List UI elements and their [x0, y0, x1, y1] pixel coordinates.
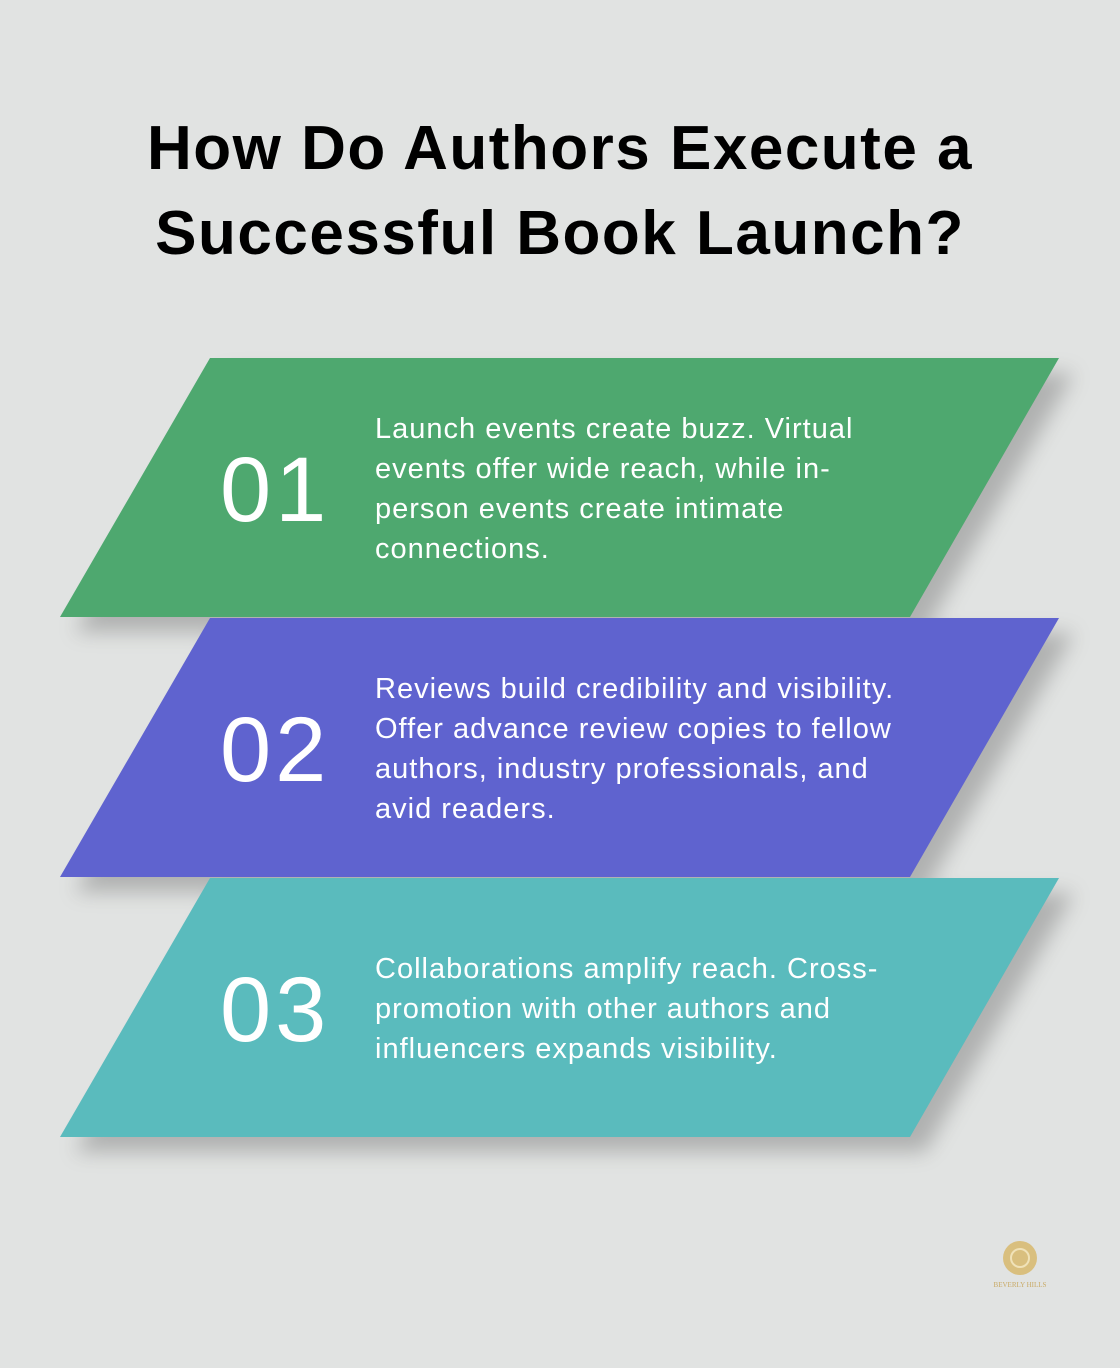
panel 2 shape — [60, 618, 1059, 877]
logo: BEVERLY HILLS — [994, 1281, 1047, 1289]
title: How Do Authors Execute a — [147, 114, 973, 183]
panel 3 shape — [60, 878, 1059, 1137]
panel 1 shape — [60, 358, 1059, 617]
number 01: 01 — [220, 439, 330, 541]
logo — [994, 1241, 1047, 1289]
number 03: 03 — [220, 959, 330, 1061]
text 03: Collaborations amplify reach. Cross-promotion with other authors and influencers expands visibility. — [375, 953, 878, 1065]
text 01: Launch events create buzz. Virtual events offer wide reach, while in-person events create intimate connections. — [375, 413, 853, 565]
number 02: 02 — [220, 699, 330, 801]
text 02: Reviews build credibility and visibility. Offer advance review copies to fellow authors, industry professionals, and avid readers. — [375, 673, 894, 825]
title: Successful Book Launch? — [155, 199, 965, 268]
shadows — [75, 373, 1074, 1152]
title — [147, 114, 973, 268]
